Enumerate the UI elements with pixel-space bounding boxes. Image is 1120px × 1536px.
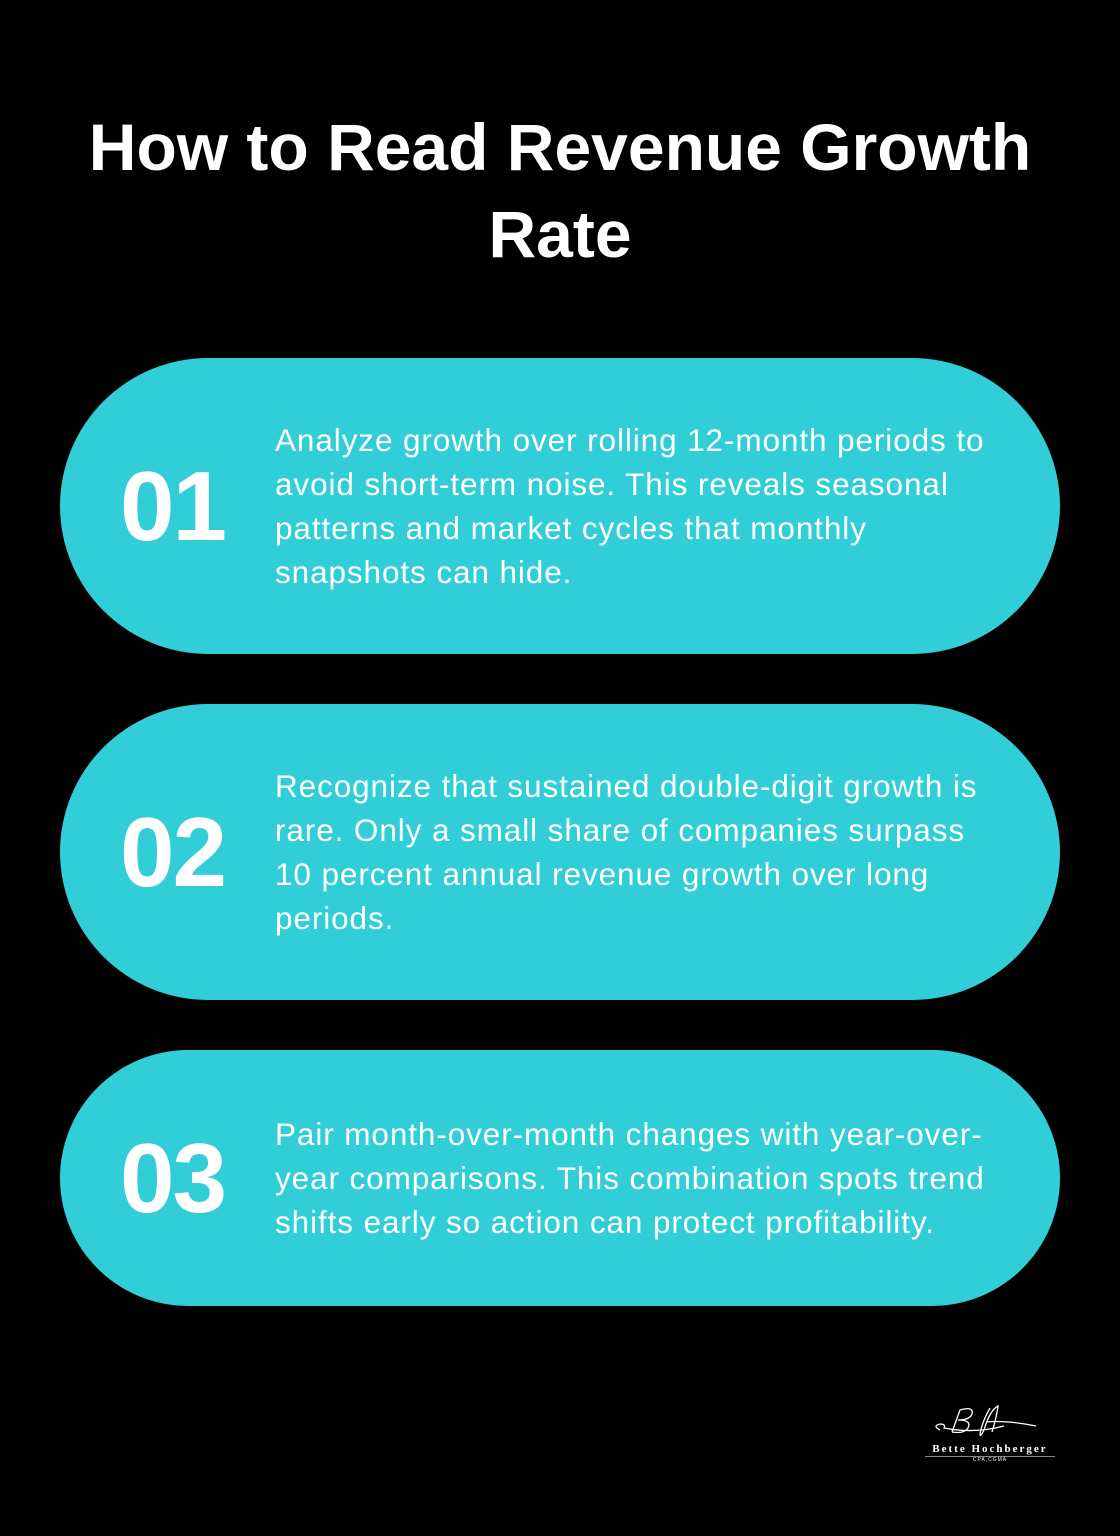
text: step 03: shifts early so action can protect profitability.: [275, 1204, 935, 1240]
text: step 01: snapshots can hide.: [275, 554, 572, 590]
text: step 02: 10 percent annual revenue growth over long: [275, 856, 929, 892]
text: step 02: rare. Only a small share of companies surpass: [275, 812, 965, 848]
text: step 03: Pair month-over-month changes with year-over-: [275, 1116, 983, 1152]
title: [89, 110, 1031, 271]
panel: step 03: [60, 1050, 1060, 1306]
number 02: 02: [120, 796, 225, 906]
title: How to Read Revenue Growth: [89, 110, 1031, 184]
logo: [925, 1404, 1055, 1463]
text: step 01: Analyze growth over rolling 12-month periods to: [275, 422, 984, 458]
text: step 01: patterns and market cycles that monthly: [275, 510, 867, 546]
logo: Bette Hochberger: [932, 1443, 1048, 1455]
text: step 02: Recognize that sustained double-digit growth is: [275, 768, 977, 804]
panel: step 01: [60, 358, 1060, 654]
logo: CPA,CGMA: [973, 1457, 1007, 1463]
text: step 03: year comparisons. This combination spots trend: [275, 1160, 985, 1196]
text: step 02: periods.: [275, 900, 394, 936]
number 03: 03: [120, 1122, 225, 1232]
text: step 03: [275, 1116, 985, 1240]
title: Rate: [488, 197, 632, 271]
panel: step 02: [60, 704, 1060, 1000]
text: step 01: avoid short-term noise. This reveals seasonal: [275, 466, 949, 502]
number 01: 01: [120, 450, 225, 560]
text: step 02: [275, 768, 977, 936]
text: step 01: [275, 422, 984, 590]
